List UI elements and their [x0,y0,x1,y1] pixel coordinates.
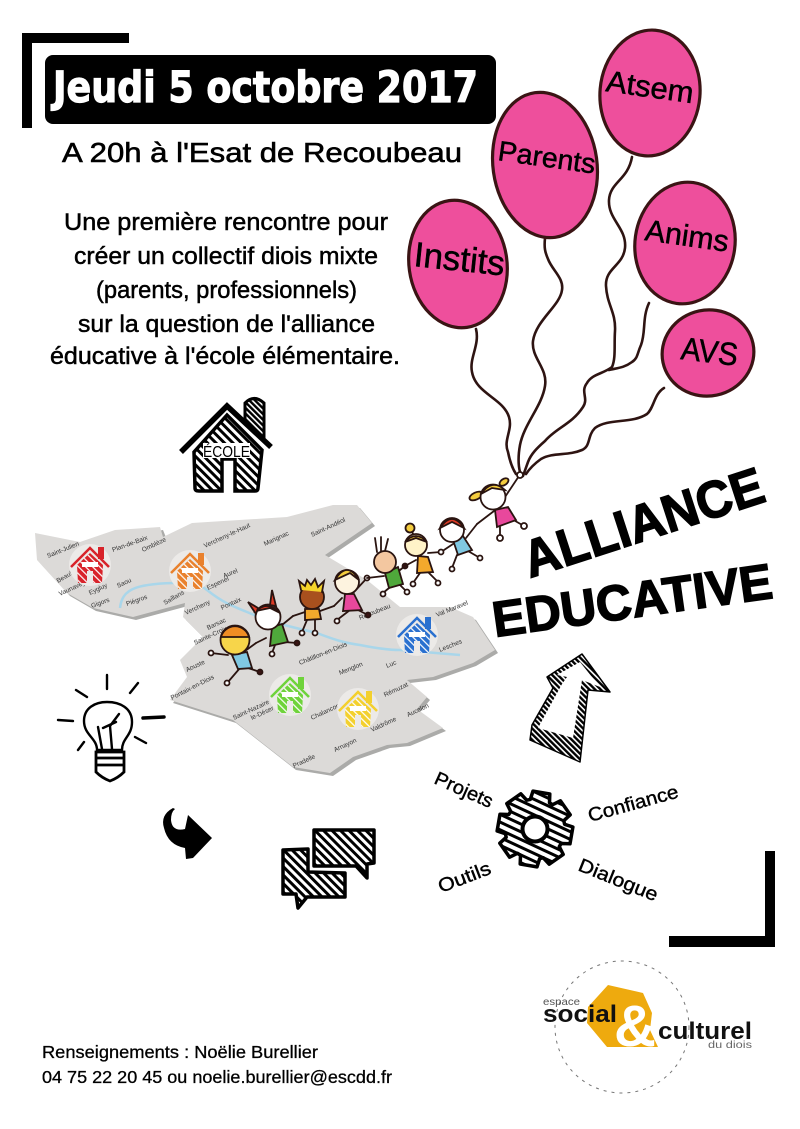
commune labels: Saint-Andéol [310,517,347,539]
commune labels: Aucelon [406,702,430,719]
commune labels: Barsac [206,617,228,632]
icon: curved black arrow [163,808,212,859]
logo: espace social et culturel: culturel [658,1018,752,1045]
contact information: Renseignements : Noëlie Burellier [42,1042,318,1062]
commune labels: Châtillon-en-Diois [298,641,349,667]
balloon: AVS [654,301,762,405]
child 3: orange shirt [293,579,334,636]
commune labels: Saint-Julien [46,540,81,560]
description text: créer un collectif diois mixte [74,243,378,270]
child 1: blue shirt [208,626,262,686]
commune labels: Chalancon [310,702,341,722]
commune labels [46,517,470,770]
balloon: Atsem [595,26,705,160]
heading: ALLIANCE: ALLIANCE [516,457,771,589]
map pin: green school [269,674,311,716]
description text: éducative à l'école élémentaire. [50,343,400,370]
balloon: Atsem: Atsem [604,65,696,110]
date banner [45,55,496,124]
balloon: Anims [627,176,743,310]
commune labels: Plan-de-Baix [111,534,149,554]
logo: espace social et culturel [543,961,752,1093]
commune labels: Luc [385,659,398,670]
commune labels: Lesches [438,638,464,654]
venue and time: A 20h à l'Esat de Recoubeau [62,137,462,168]
description text: sur la question de l'alliance [78,311,375,338]
icon: hatched arrow [530,654,610,762]
commune labels: Marignac [263,530,291,548]
balloon: Anims: Anims [643,214,731,259]
child 2: green dress [248,590,300,656]
commune labels: Beaufort [56,566,80,585]
commune labels: Pontaix-en-Diois [170,674,216,702]
commune labels: Arnayon [333,737,358,754]
commune labels: Vercheny [184,599,212,617]
logo: espace social et culturel: du diois [708,1040,752,1051]
label: Confiance: Confiance [586,782,681,827]
icon: light bulb [58,675,164,781]
child 8: pink dress holding balloons [468,472,527,541]
commune labels: Rémuzat [383,681,410,699]
map pin: orange school [169,550,211,592]
balloon: Parents: Parents [496,135,598,180]
description text: (parents, professionnels) [96,277,357,304]
commune labels: Gigors [90,596,111,610]
logo: espace social et culturel: espace [543,997,580,1008]
map pin: yellow school [337,688,379,730]
top-left corner bracket [22,33,129,128]
commune labels: Aurel [222,567,239,580]
commune labels: Val Maravel [435,599,470,619]
logo: espace social et culturel: & [614,994,656,1059]
commune labels: Espenel [206,575,231,592]
balloon: Instits [401,194,515,334]
children holding hands [208,472,527,686]
logo: espace social et culturel: social [543,1001,617,1028]
commune labels: Saou [116,577,133,590]
description text [50,209,400,370]
commune labels: Piégros [125,594,149,608]
commune labels: Sainte-Croix [193,625,229,647]
commune labels: Menglon [338,661,364,677]
label: Projets: Projets [431,768,496,813]
child 6: orange dress [405,524,441,586]
label: Dialogue: Dialogue [575,855,661,906]
balloon: Parents [483,85,607,245]
commune labels: Pradelle [292,753,317,770]
map pin: blue school [396,614,438,656]
child 7: blue shirt, red hair [438,518,482,572]
commune labels: Saillans [162,589,186,607]
date banner: Jeudi 5 octobre 2017 [50,63,478,113]
child 4: pink dress [334,570,370,624]
commune labels: Vercheny-le-Haut [203,522,252,550]
label: Outils: Outils [435,858,494,898]
commune labels: Vaunaveys [58,578,90,598]
map of the Diois [35,505,498,776]
balloon: Instits: Instits [412,235,507,283]
balloon: AVS: AVS [679,330,740,373]
map pin: red school [69,544,111,586]
river [120,583,460,655]
heading: EDUCATIVE: EDUCATIVE [489,553,776,648]
commune labels: le-Désert [250,704,277,722]
bottom-right corner bracket [669,851,775,947]
commune labels: Valdrôme [370,716,398,734]
icon: speech bubbles [283,830,374,908]
icon: school house [181,398,271,491]
contact information [42,1042,392,1087]
description text: Une première rencontre pour [64,209,388,236]
commune labels: Omblèze [141,536,168,554]
commune labels: Pontaix [220,596,243,612]
balloon strings [471,157,664,476]
commune labels: Saint-Nazaire [232,699,271,722]
commune labels: Eygluy [88,582,109,597]
commune labels: Aouste [185,659,207,674]
child 5: green shirt [367,537,410,596]
commune labels: Recoubeau [358,603,392,622]
contact information: 04 75 22 20 45 ou noelie.burellier@escdd.fr [42,1067,392,1087]
icon: school house: ÉCOLE [203,444,250,461]
icon: gear [497,791,573,867]
